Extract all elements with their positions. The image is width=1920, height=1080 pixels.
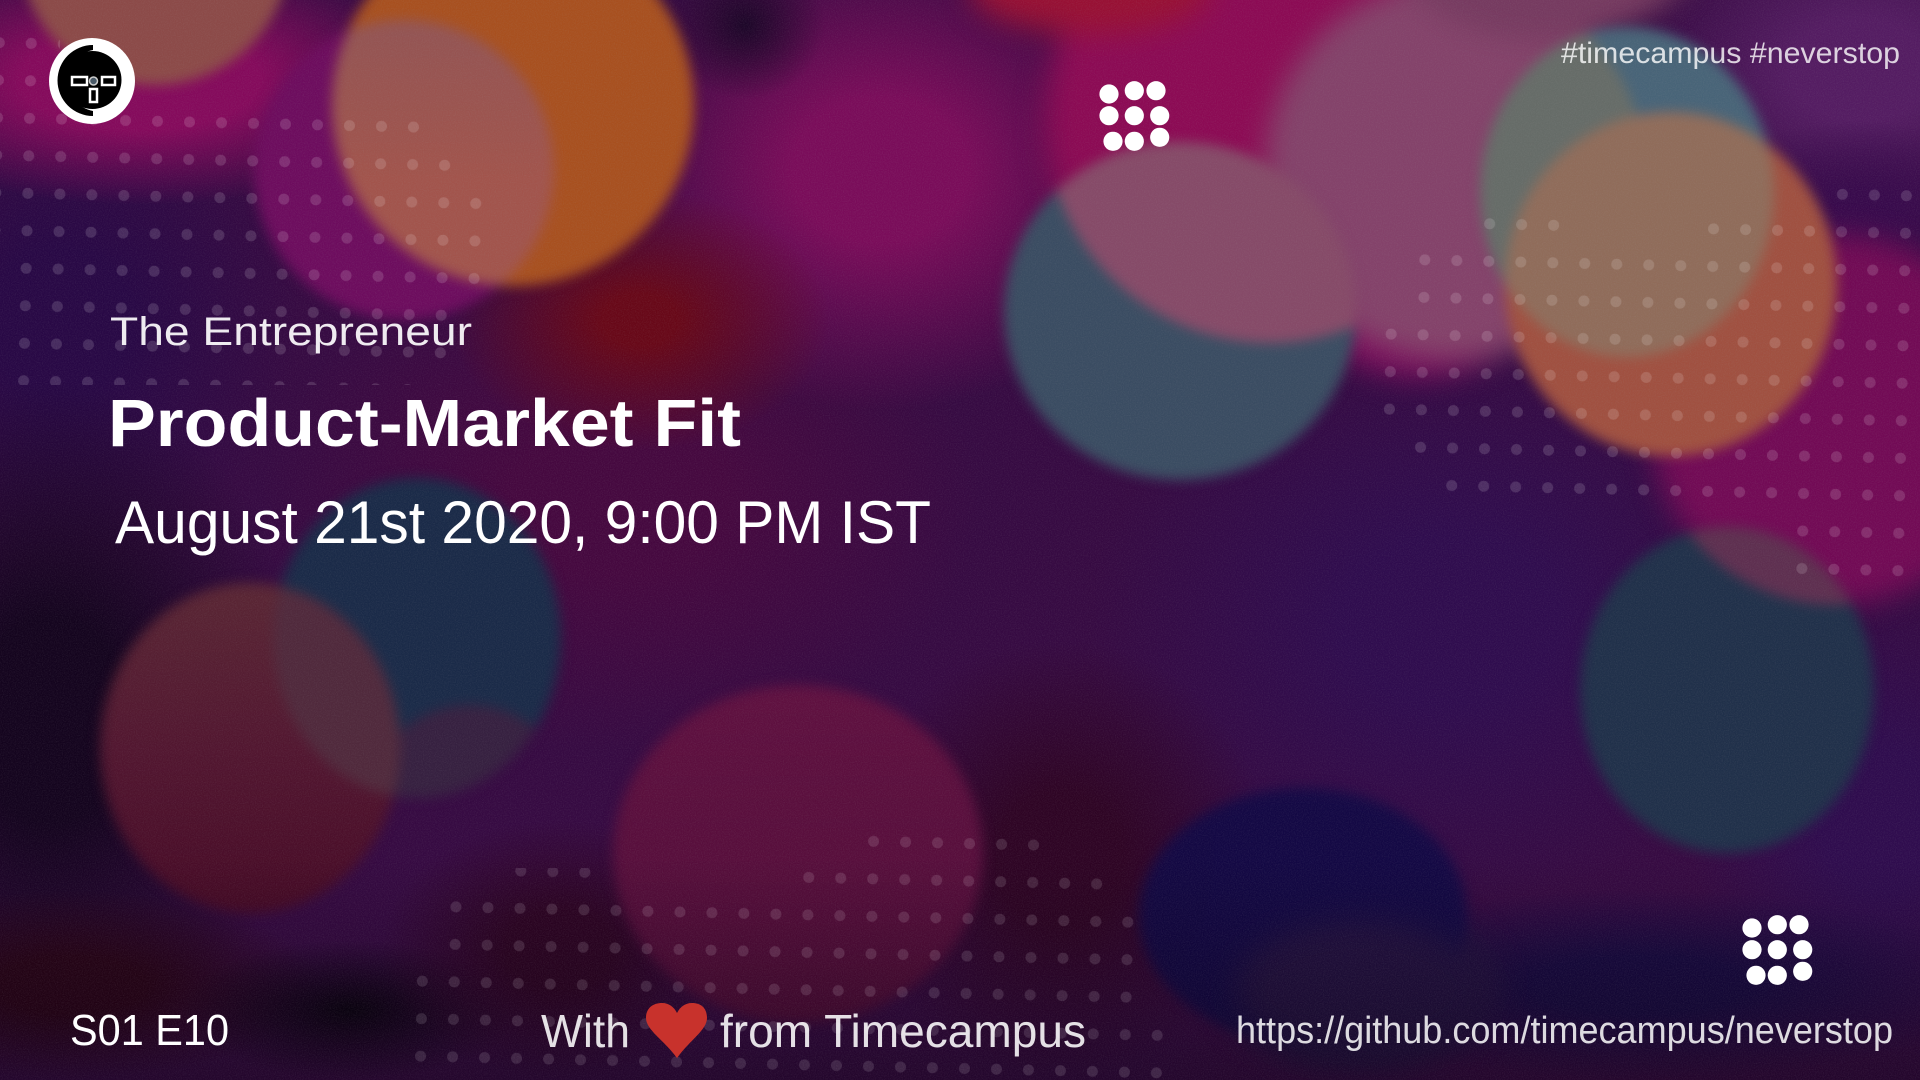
credit: with: With: [541, 1005, 630, 1057]
indigo lower: [1220, 900, 1500, 1070]
logo: [49, 38, 135, 124]
dot pattern bottom: [410, 825, 1170, 1080]
wine circle bottom: [613, 685, 983, 1023]
indigo circle bottom: [1139, 788, 1467, 1042]
dot pattern right: [1370, 175, 1920, 590]
credit: from: from Timecampus: [720, 1005, 1086, 1057]
url: https://github.com/timecampus/neverstop: [1236, 1010, 1893, 1052]
navy circle left: [273, 478, 561, 798]
title: Product-Market Fit: [108, 386, 741, 461]
navy circle right: [1580, 527, 1874, 853]
orange circle: [332, 0, 694, 286]
indigo lower overlay: [1235, 920, 1485, 1060]
icon: heart: [646, 1003, 707, 1058]
tan circle right: [1505, 112, 1837, 456]
soft crimson circle: [970, 0, 1920, 1070]
pale rose circle: [1265, 0, 1645, 360]
hashtags: #timecampus #neverstop: [1561, 37, 1900, 70]
slate circle top right: [1480, 27, 1774, 357]
episode label: S01 E10: [70, 1006, 229, 1055]
series label: The Entrepreneur: [110, 310, 472, 354]
icon: dot grid top: [1099, 81, 1169, 151]
bottom shade: [0, 860, 1920, 1080]
magenta circle left: [254, 20, 554, 320]
slate circle centre: [1004, 142, 1356, 480]
logo crescent: [58, 45, 93, 116]
top-left circle: [20, 0, 290, 85]
dot pattern top left: [0, 28, 490, 385]
icon: dot grid bottom: [1742, 915, 1812, 985]
date: August 21st 2020, 9:00 PM IST: [115, 489, 931, 556]
red circle left: [100, 583, 400, 913]
